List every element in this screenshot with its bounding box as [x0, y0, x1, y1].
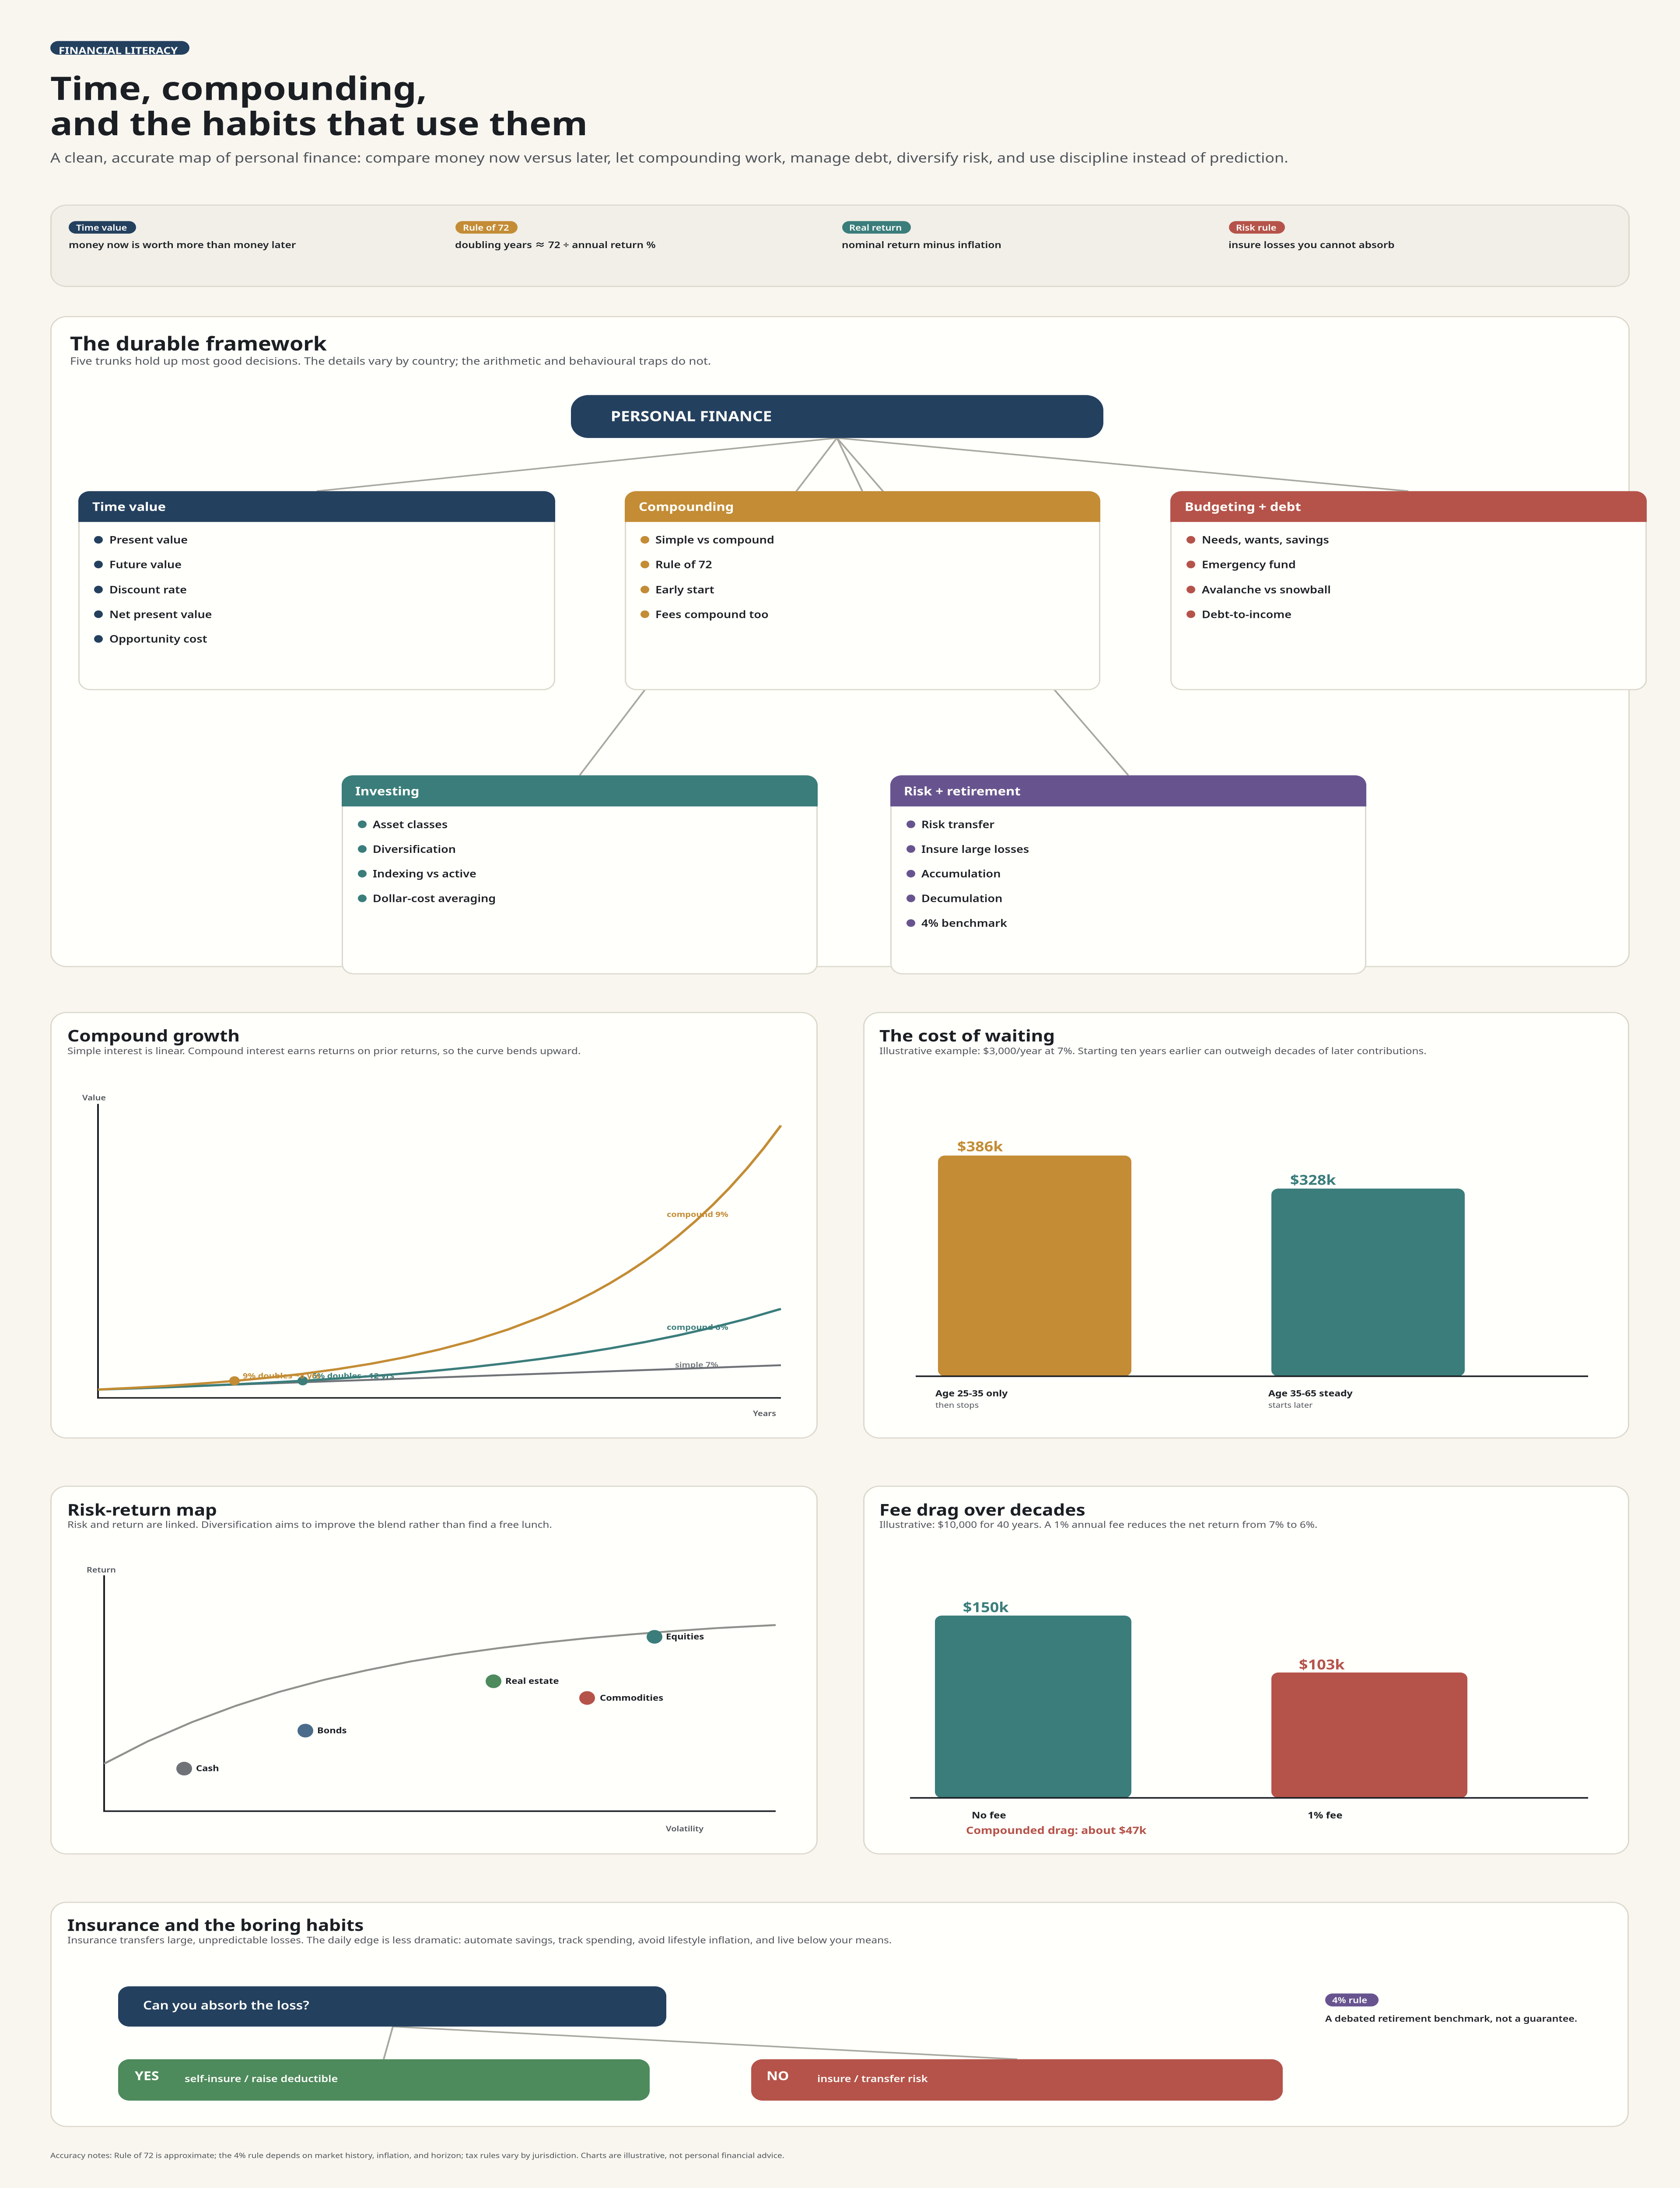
- scatter axes: Volatility: [666, 1823, 704, 1834]
- key idea: time value: money now is worth more than money later: [69, 238, 296, 251]
- 4% rule callout: A debated retirement benchmark, not a guarantee.: [1325, 2013, 1577, 2024]
- bar: 1% fee: $103k: [1299, 1655, 1345, 1673]
- key idea: time value: Time value: [76, 222, 127, 233]
- trunk card: time value: Discount rate: [109, 583, 187, 596]
- 4% rule callout: [1325, 1994, 1577, 2024]
- bar: age 25-35: Age 25-35 only: [935, 1388, 1008, 1399]
- trunk card: time value: Time value: [92, 498, 166, 515]
- key idea: rule of 72: doubling years ≈ 72 ÷ annual return %: [455, 238, 656, 251]
- key idea: time value: [69, 221, 296, 251]
- trunk card: compounding: Early start: [655, 583, 714, 596]
- panel: the durable framework: [51, 317, 1647, 974]
- outcome: no: NO: [766, 2067, 789, 2084]
- bar: no fee: [935, 1598, 1131, 1821]
- fee drag heading: [879, 1499, 1317, 1531]
- trunk card: time value: Present value: [109, 533, 188, 547]
- subtitle: A clean, accurate map of personal finance: compare money now versus later, let compounding work, manage debt, diversify risk, and use discipline instead of prediction.: [50, 148, 1288, 167]
- risk-return heading: [67, 1499, 552, 1531]
- series: compound 6%: [98, 1309, 781, 1389]
- trunk card: time value: Future value: [109, 558, 182, 572]
- scatter chart: [87, 1565, 776, 1834]
- series: compound 6%: 6% doubles ~12 yrs: [312, 1371, 394, 1381]
- baseline: [910, 1797, 1588, 1799]
- compound growth heading: [67, 1024, 581, 1057]
- panel: insurance and the boring habits: [51, 1902, 1628, 2126]
- key idea: rule of 72: Rule of 72: [463, 222, 509, 233]
- drag callout: Compounded drag: about $47k: [966, 1823, 1147, 1837]
- scatter axes: Return: [87, 1565, 116, 1575]
- point: real estate: Real estate: [505, 1676, 559, 1687]
- framework heading: The durable framework: [70, 330, 327, 356]
- trunk card: compounding: Simple vs compound: [655, 533, 774, 547]
- trunk card: risk and retirement: Risk transfer: [921, 817, 994, 831]
- point: equities: Equities: [666, 1631, 704, 1642]
- decision question: Can you absorb the loss?: [143, 1996, 309, 2013]
- bar: 1% fee: [1271, 1655, 1467, 1821]
- trunk card: budgeting and debt: Emergency fund: [1202, 558, 1296, 572]
- insurance heading: [67, 1914, 892, 1946]
- root node: PERSONAL FINANCE: [611, 407, 772, 426]
- frontier curve: [104, 1625, 776, 1764]
- trunk card: investing: Investing: [355, 783, 419, 799]
- series: compound 6%: compound 6%: [667, 1322, 728, 1332]
- decision connectors: [384, 2027, 1017, 2059]
- trunk card: investing: Asset classes: [373, 817, 448, 831]
- 4% rule callout: 4% rule: [1332, 1995, 1367, 2006]
- bar: age 35-65: starts later: [1268, 1400, 1313, 1410]
- bar: no fee: $150k: [963, 1598, 1009, 1616]
- bar: age 25-35: [935, 1137, 1131, 1410]
- trunk card: budgeting and debt: Needs, wants, savings: [1202, 533, 1329, 547]
- outcome: no: insure / transfer risk: [817, 2072, 928, 2085]
- trunk card: budgeting and debt: Budgeting + debt: [1185, 498, 1301, 515]
- footer note: Accuracy notes: Rule of 72 is approximate; the 4% rule depends on market history, inflation, and horizon; tax rules vary by jurisdiction. Charts are illustrative, not personal financial advice.: [50, 2151, 784, 2160]
- trunk card: budgeting and debt: Debt-to-income: [1202, 607, 1292, 621]
- trunk card: risk and retirement: [890, 775, 1366, 974]
- trunk card: investing: [342, 775, 818, 974]
- trunk card: time value: Opportunity cost: [109, 632, 207, 646]
- key idea: real return: Real return: [849, 222, 902, 233]
- key idea: risk rule: Risk rule: [1236, 222, 1276, 233]
- chart axes: [82, 1093, 781, 1419]
- bar: age 35-65: $328k: [1290, 1170, 1336, 1189]
- panel: compound growth: [51, 1013, 817, 1438]
- fee drag heading: Fee drag over decades: [879, 1499, 1085, 1521]
- insurance heading: Insurance transfers large, unpredictable losses. The daily edge is less dramatic: automate savings, track spending, avoid lifestyle inflation, and live below your means.: [67, 1934, 892, 1946]
- compound growth heading: Compound growth: [67, 1024, 240, 1046]
- series: compound 9%: [98, 1126, 781, 1389]
- bar: age 25-35: $386k: [957, 1137, 1003, 1155]
- chart axes: Years: [753, 1408, 776, 1419]
- trunk card: budgeting and debt: Avalanche vs snowball: [1202, 583, 1331, 596]
- trunk card: compounding: Rule of 72: [655, 558, 712, 572]
- trunk card: compounding: Fees compound too: [655, 607, 769, 621]
- point: equities: [647, 1630, 704, 1644]
- trunk card: risk and retirement: Risk + retirement: [904, 783, 1021, 799]
- trunk card: investing: Diversification: [373, 842, 456, 856]
- key idea: rule of 72: [455, 221, 656, 251]
- trunk card: time value: Net present value: [109, 607, 212, 621]
- panel: key ideas strip: [51, 205, 1629, 287]
- trunk card: risk and retirement: Insure large losses: [921, 842, 1029, 856]
- bar: age 25-35: then stops: [935, 1400, 979, 1410]
- trunk card: compounding: Compounding: [639, 498, 734, 515]
- outcome: yes: self-insure / raise deductible: [185, 2072, 338, 2085]
- connectors: root to trunks: [317, 438, 1408, 775]
- trunk card: investing: Dollar-cost averaging: [373, 892, 496, 905]
- point: commodities: Commodities: [600, 1692, 663, 1704]
- title: [50, 66, 588, 145]
- point: bonds: [298, 1724, 347, 1737]
- key idea: real return: nominal return minus inflation: [842, 238, 1001, 251]
- outcome: no: [751, 2059, 1283, 2100]
- trunk card: risk and retirement: Accumulation: [921, 867, 1001, 881]
- baseline: [916, 1375, 1588, 1377]
- trunk card: compounding: [625, 491, 1100, 690]
- trunk card: risk and retirement: Decumulation: [921, 892, 1002, 905]
- bar: no fee: No fee: [972, 1809, 1006, 1821]
- trunk card: investing: Indexing vs active: [373, 867, 476, 881]
- series: simple 7%: [98, 1360, 781, 1389]
- trunk card: budgeting and debt: [1170, 491, 1647, 690]
- decision question: [118, 1986, 666, 2027]
- line chart: [82, 1093, 781, 1419]
- root node: [571, 395, 1103, 438]
- key idea: risk rule: insure losses you cannot absorb: [1228, 238, 1395, 251]
- fee drag heading: Illustrative: $10,000 for 40 years. A 1% annual fee reduces the net return from 7% to 6%.: [879, 1518, 1317, 1531]
- panel: the cost of waiting: [864, 1013, 1628, 1438]
- point: commodities: [579, 1691, 663, 1705]
- panel: fee drag over decades: [864, 1486, 1628, 1854]
- eyebrow pill: FINANCIAL LITERACY: [59, 44, 178, 57]
- bar: 1% fee: 1% fee: [1308, 1809, 1343, 1821]
- point: cash: [176, 1762, 219, 1775]
- point: bonds: Bonds: [317, 1725, 347, 1736]
- header: [50, 41, 1288, 167]
- key idea: real return: [842, 221, 1001, 251]
- title: Time, compounding,: [50, 66, 427, 110]
- outcome: yes: YES: [135, 2067, 159, 2084]
- risk-return heading: Risk-return map: [67, 1499, 217, 1521]
- trunk card: time value: [78, 491, 555, 690]
- key idea: risk rule: [1228, 221, 1395, 251]
- cost of waiting heading: The cost of waiting: [879, 1024, 1055, 1046]
- insurance heading: Insurance and the boring habits: [67, 1914, 364, 1936]
- series: simple 7%: simple 7%: [675, 1360, 718, 1370]
- point: cash: Cash: [196, 1763, 219, 1774]
- title: and the habits that use them: [50, 101, 588, 145]
- point: real estate: [486, 1674, 559, 1688]
- risk-return heading: Risk and return are linked. Diversification aims to improve the blend rather than find a free lunch.: [67, 1518, 552, 1531]
- framework heading: Five trunks hold up most good decisions. The details vary by country; the arithmetic and behavioural traps do not.: [70, 353, 711, 368]
- cost of waiting heading: Illustrative example: $3,000/year at 7%. Starting ten years earlier can outweigh decades of later contributions.: [879, 1045, 1427, 1057]
- panel: risk-return map: [51, 1486, 817, 1854]
- series: compound 9%: 9% doubles ~8 yrs: [243, 1371, 320, 1381]
- chart axes: Value: [82, 1093, 106, 1103]
- bar: age 35-65: [1268, 1170, 1465, 1410]
- bar: age 35-65: Age 35-65 steady: [1268, 1388, 1353, 1399]
- scatter axes: [87, 1565, 776, 1834]
- compound growth heading: Simple interest is linear. Compound interest earns returns on prior returns, so the curve bends upward.: [67, 1045, 581, 1057]
- framework heading: [70, 330, 711, 368]
- series: compound 9%: compound 9%: [667, 1210, 728, 1220]
- outcome: yes: [118, 2059, 650, 2100]
- cost of waiting heading: [879, 1024, 1427, 1057]
- trunk card: risk and retirement: 4% benchmark: [921, 916, 1007, 930]
